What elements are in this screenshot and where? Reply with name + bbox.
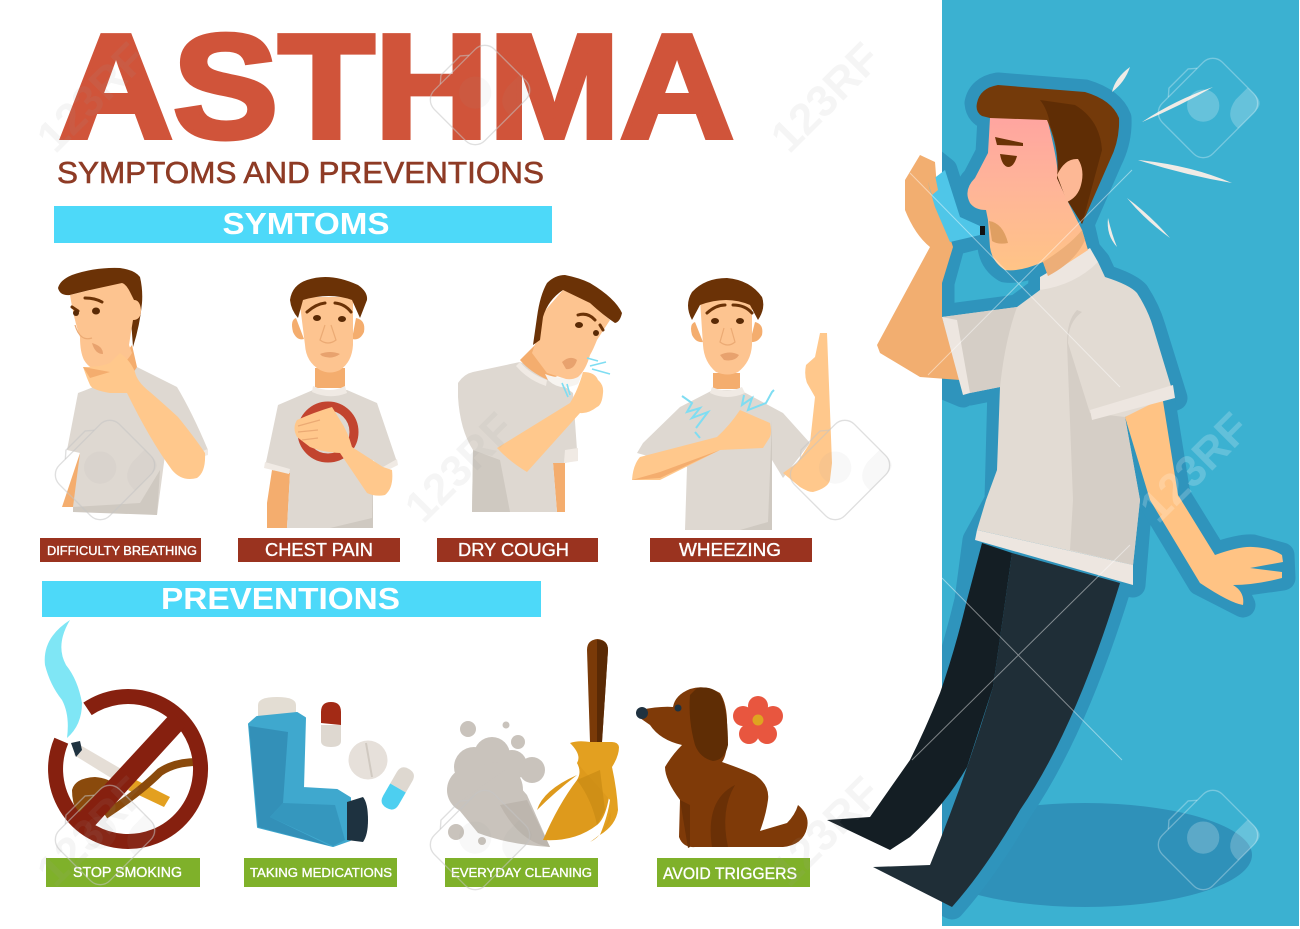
heading: symptoms band: SYMTOMS <box>222 206 390 241</box>
icon: no smoking <box>45 620 201 842</box>
label: taking medications <box>244 858 397 887</box>
fingers over inhaler <box>928 175 938 195</box>
watermarks: 123RF <box>762 768 890 896</box>
t-shirt <box>942 262 1173 565</box>
back trouser leg <box>827 543 1012 850</box>
label: dry cough <box>437 538 598 562</box>
raised arm and hand <box>877 155 960 380</box>
label: wheezing <box>650 538 812 562</box>
label: everyday cleaning: EVERYDAY CLEANING <box>451 865 592 880</box>
blue halo around figure <box>942 72 1296 920</box>
watermarks: 123RF <box>762 34 890 162</box>
label: avoid triggers: AVOID TRIGGERS <box>663 864 797 883</box>
face <box>967 118 1088 276</box>
motion lines <box>1108 67 1232 247</box>
inhaler held at mouth <box>928 170 985 242</box>
label: everyday cleaning <box>445 858 598 887</box>
hair <box>977 85 1119 224</box>
watermarks: 123RF <box>1131 404 1259 532</box>
illustration: man using inhaler <box>827 67 1283 907</box>
icon: dog and flower <box>636 687 808 848</box>
heading: preventions band: PREVENTIONS <box>161 581 400 616</box>
watermarks: 123RF <box>28 34 156 162</box>
label: chest pain <box>238 538 400 562</box>
label: avoid triggers <box>657 858 810 887</box>
figure: difficulty breathing <box>58 268 208 515</box>
label: difficulty breathing <box>40 538 201 562</box>
floor shadow <box>978 803 1252 907</box>
figure: wheezing <box>632 278 832 530</box>
heading: symptoms band <box>54 206 552 243</box>
collar <box>1040 248 1098 290</box>
thin watermark cross lines <box>910 170 1132 760</box>
icon: inhaler and pills <box>249 697 417 846</box>
front trouser leg <box>873 553 1120 907</box>
label: dry cough: DRY COUGH <box>458 540 569 560</box>
watermarks: 123RF <box>396 404 524 532</box>
title: ASTHMA <box>59 4 734 170</box>
label: chest pain: CHEST PAIN <box>265 540 373 560</box>
label: taking medications: TAKING MEDICATIONS <box>250 865 392 880</box>
neck shadow <box>1043 230 1085 276</box>
panel: blue background <box>942 0 1299 926</box>
heading: preventions band <box>42 581 541 617</box>
eye and brow <box>995 137 1023 167</box>
watermarks: 123RF <box>28 768 156 896</box>
figure: dry cough <box>458 275 622 512</box>
icon: dust and broom <box>447 639 619 847</box>
label: wheezing: WHEEZING <box>679 540 781 560</box>
label: stop smoking: STOP SMOKING <box>73 865 182 881</box>
shirt cuffs and hem <box>942 317 1175 585</box>
label: stop smoking <box>46 858 200 887</box>
ear <box>1057 159 1082 202</box>
t-shirt shading <box>942 307 1140 565</box>
label: difficulty breathing: DIFFICULTY BREATHING <box>47 544 197 558</box>
subtitle: SYMPTOMS AND PREVENTIONS <box>57 155 544 190</box>
mouth <box>989 221 1008 244</box>
figure: chest pain <box>264 277 398 528</box>
right arm and hand <box>1125 395 1283 605</box>
